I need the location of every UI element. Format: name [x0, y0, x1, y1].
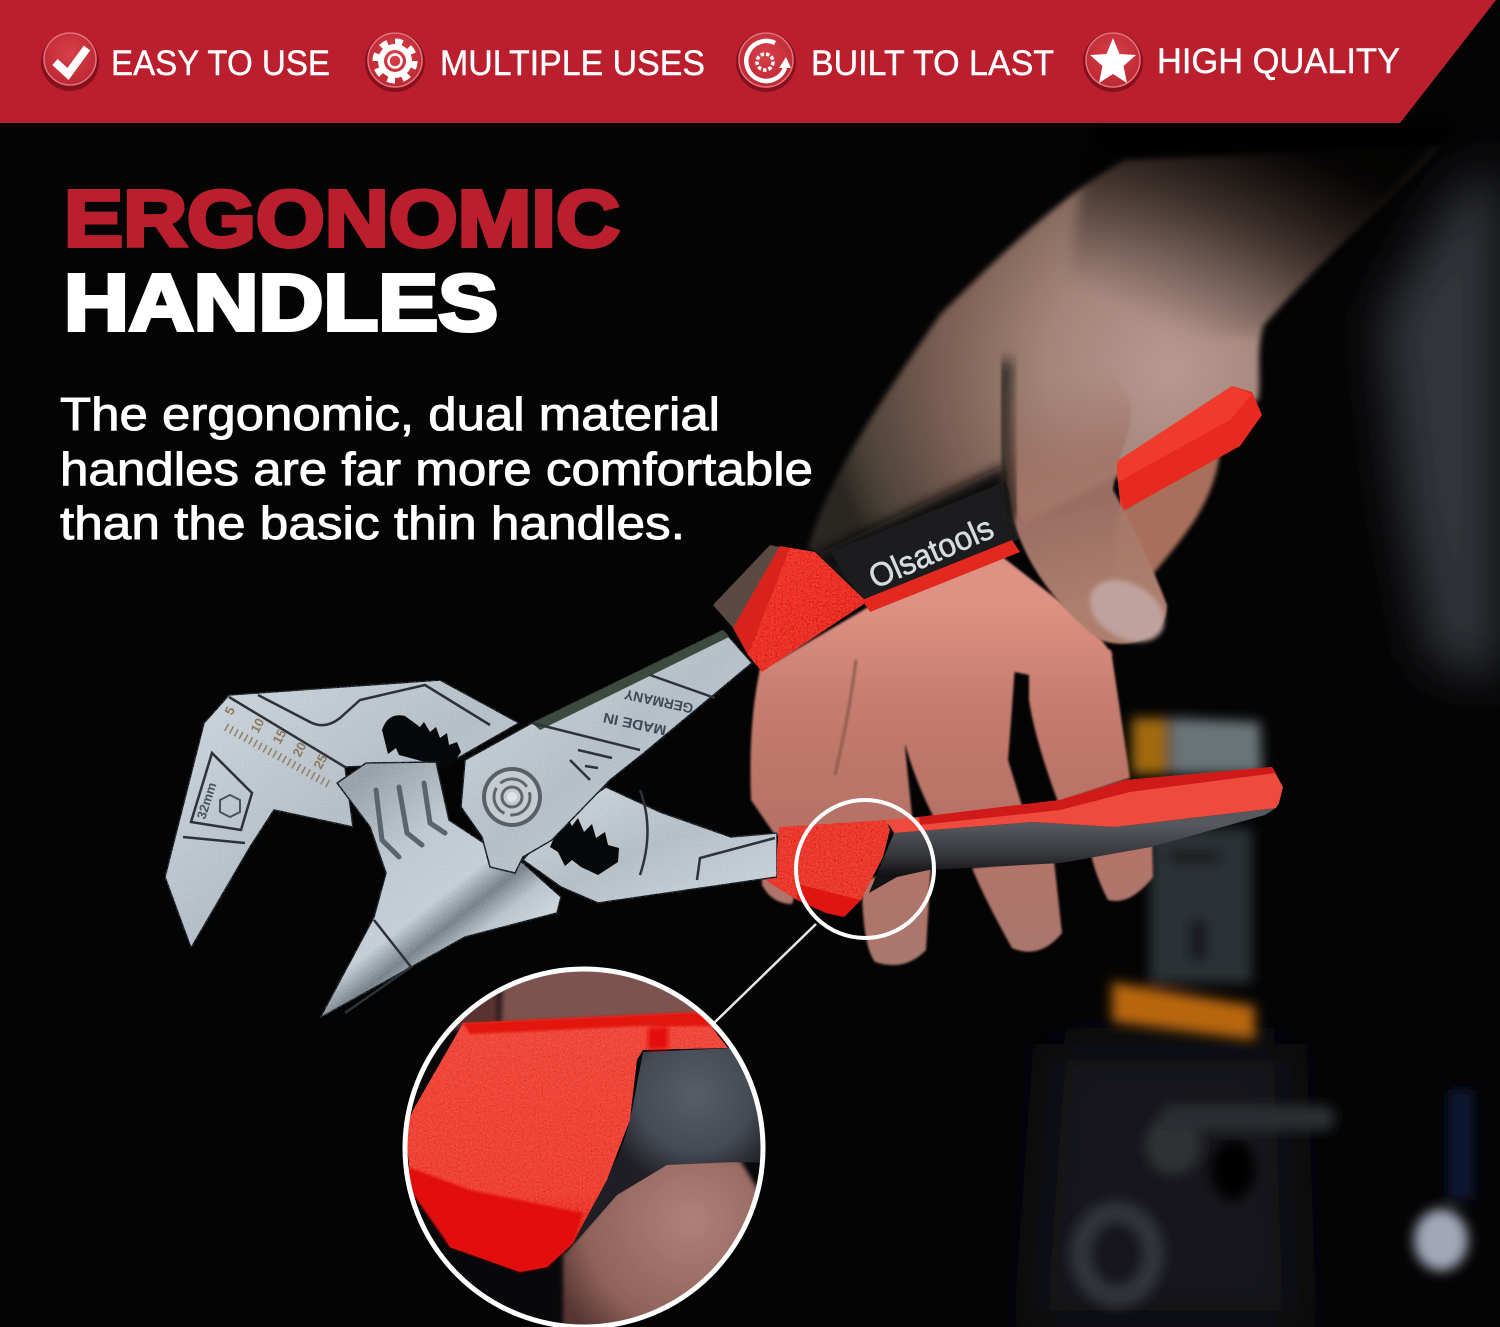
pliers: lower handle [765, 767, 1283, 917]
jaw ridges [376, 783, 445, 857]
badge: easy to use: EASY TO USE [111, 44, 330, 83]
ruler numbers: 25 [310, 752, 330, 771]
ruler numbers: 10 [247, 716, 267, 735]
hand: skin right of thumb [1110, 446, 1221, 600]
engraved text: MADE IN [602, 710, 668, 739]
title: ERGONOMIC [64, 174, 620, 263]
description text: than the basic thin handles. [60, 497, 685, 549]
ring finger [906, 638, 1024, 818]
upper handle: black grip with red strip [815, 465, 1030, 612]
badge: built to last [736, 32, 1054, 92]
blurred skin above handle [498, 972, 718, 1034]
ruler numbers: 5 [221, 704, 238, 717]
description text: The ergonomic, dual material [60, 388, 720, 440]
title: HANDLES [64, 258, 498, 347]
badge: high quality [1083, 32, 1400, 92]
rear plate to lower handle [523, 787, 777, 903]
metal grooves [183, 675, 775, 1013]
ruler ticks [226, 727, 330, 785]
moving jaw [320, 762, 561, 1018]
lower slot with teeth [550, 813, 619, 875]
badge: multiple uses: MULTIPLE USES [440, 44, 705, 83]
pliers: metal head [165, 630, 777, 1018]
connector line [714, 924, 816, 1023]
index finger [750, 640, 856, 835]
middle finger [833, 620, 960, 825]
finger crease [835, 660, 856, 775]
magnifier target circle on handle [714, 800, 934, 1023]
badge: easy to use [41, 33, 330, 91]
red bolster [405, 1012, 728, 1272]
magnified detail circle [400, 960, 770, 1327]
badge: high quality: HIGH QUALITY [1157, 42, 1400, 81]
hand: palm and fingers behind pliers [750, 555, 1153, 965]
pliers: metal head: GERMANY [622, 686, 695, 717]
wrench jaw upper [165, 680, 519, 948]
black grip [562, 1048, 760, 1254]
title [64, 174, 620, 347]
upper slot with teeth [382, 715, 461, 770]
skin below grip [563, 1160, 770, 1327]
ruler numbers: 20 [289, 740, 309, 759]
badge: multiple uses [365, 32, 705, 92]
upper handle: red sleeve end [1116, 386, 1262, 512]
thumbnail [1079, 568, 1175, 654]
pliers: upper handle bolster [713, 545, 867, 672]
brand logo on grip: Olsatools [863, 509, 999, 595]
description text: handles are far more comfortable [60, 443, 813, 495]
centre plate and upper arm [461, 630, 752, 873]
palm [758, 555, 1113, 675]
pivot screw [482, 767, 542, 827]
description text [60, 388, 813, 549]
hand: back of hand and wrist [808, 120, 1460, 590]
pinky finger [1029, 647, 1130, 802]
hand: thumb wrapping handle [1004, 344, 1175, 654]
size marking: 32mm [194, 781, 219, 821]
top banner [0, 0, 1496, 123]
ruler numbers [221, 704, 330, 771]
badge: built to last: BUILT TO LAST [811, 44, 1054, 83]
ruler numbers: 15 [269, 727, 289, 746]
